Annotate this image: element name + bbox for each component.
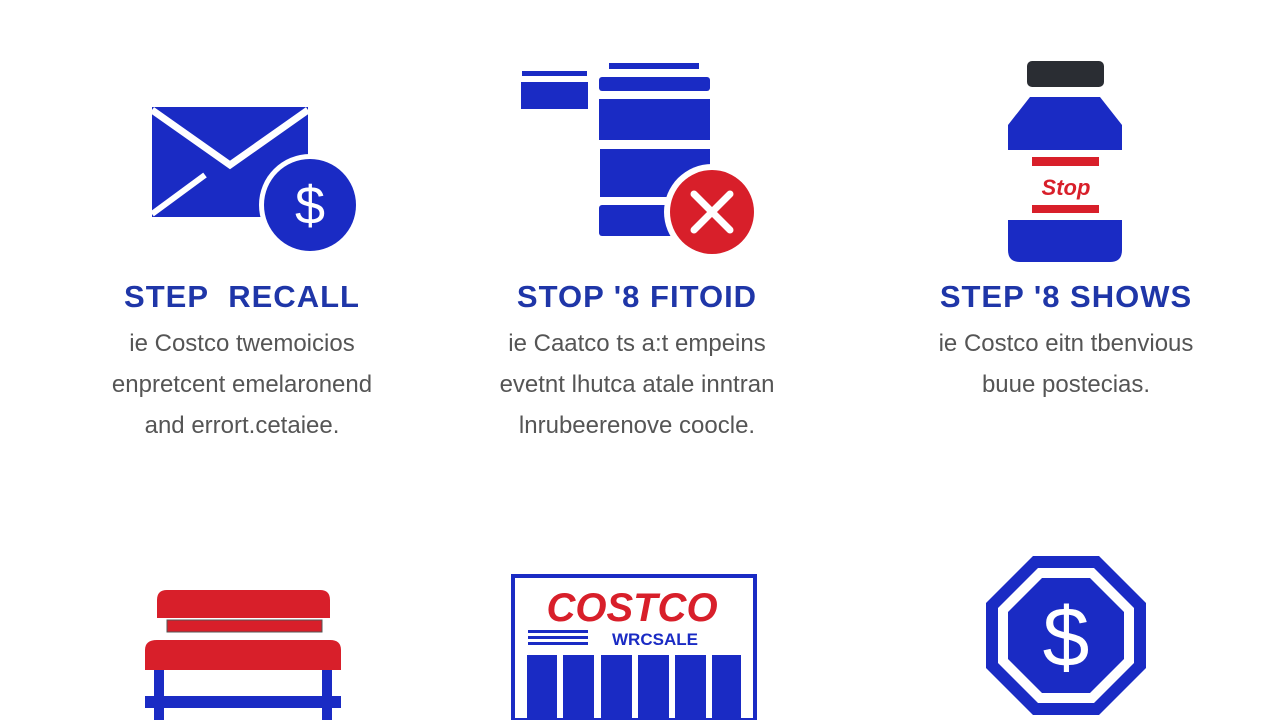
text block: shows: ie Costco eitn tbenvious (939, 330, 1193, 357)
text block: fitoid: ie Caatco ts a:t empeins (508, 330, 766, 357)
icon: jar with stop label: Stop (1042, 175, 1090, 200)
icon: stacked containers with red x (521, 63, 760, 260)
icon: jar with stop label (1008, 61, 1122, 262)
text block: fitoid (500, 330, 774, 439)
icon: costco warehouse sign: COSTCO (546, 586, 718, 630)
icon: octagon dollar sign: $ (1043, 590, 1089, 684)
icon: bench (145, 590, 341, 720)
icon: envelope with dollar coin: $ (295, 176, 325, 236)
icon: octagon dollar sign (986, 556, 1146, 715)
text block: recall: and errort.cetaiee. (145, 412, 339, 439)
text block: shows: buue postecias. (982, 371, 1150, 398)
heading: step recall: STEP RECALL (124, 279, 360, 314)
text block: recall (112, 330, 372, 439)
icon: costco warehouse sign: WRCSALE (612, 630, 698, 649)
icon: envelope with dollar coin (152, 107, 361, 256)
heading: step shows: STEP '8 SHOWS (940, 279, 1192, 314)
text block: fitoid: evetnt lhutca atale inntran (500, 371, 774, 398)
text block: fitoid: lnrubeerenove coocle. (519, 412, 755, 439)
text block: shows (939, 330, 1193, 398)
text block: recall: ie Costco twemoicios (129, 330, 355, 357)
heading: stop fitoid: STOP '8 FITOID (517, 279, 757, 314)
text block: recall: enpretcent emelaronend (112, 371, 372, 398)
icon: costco warehouse sign (513, 576, 755, 720)
